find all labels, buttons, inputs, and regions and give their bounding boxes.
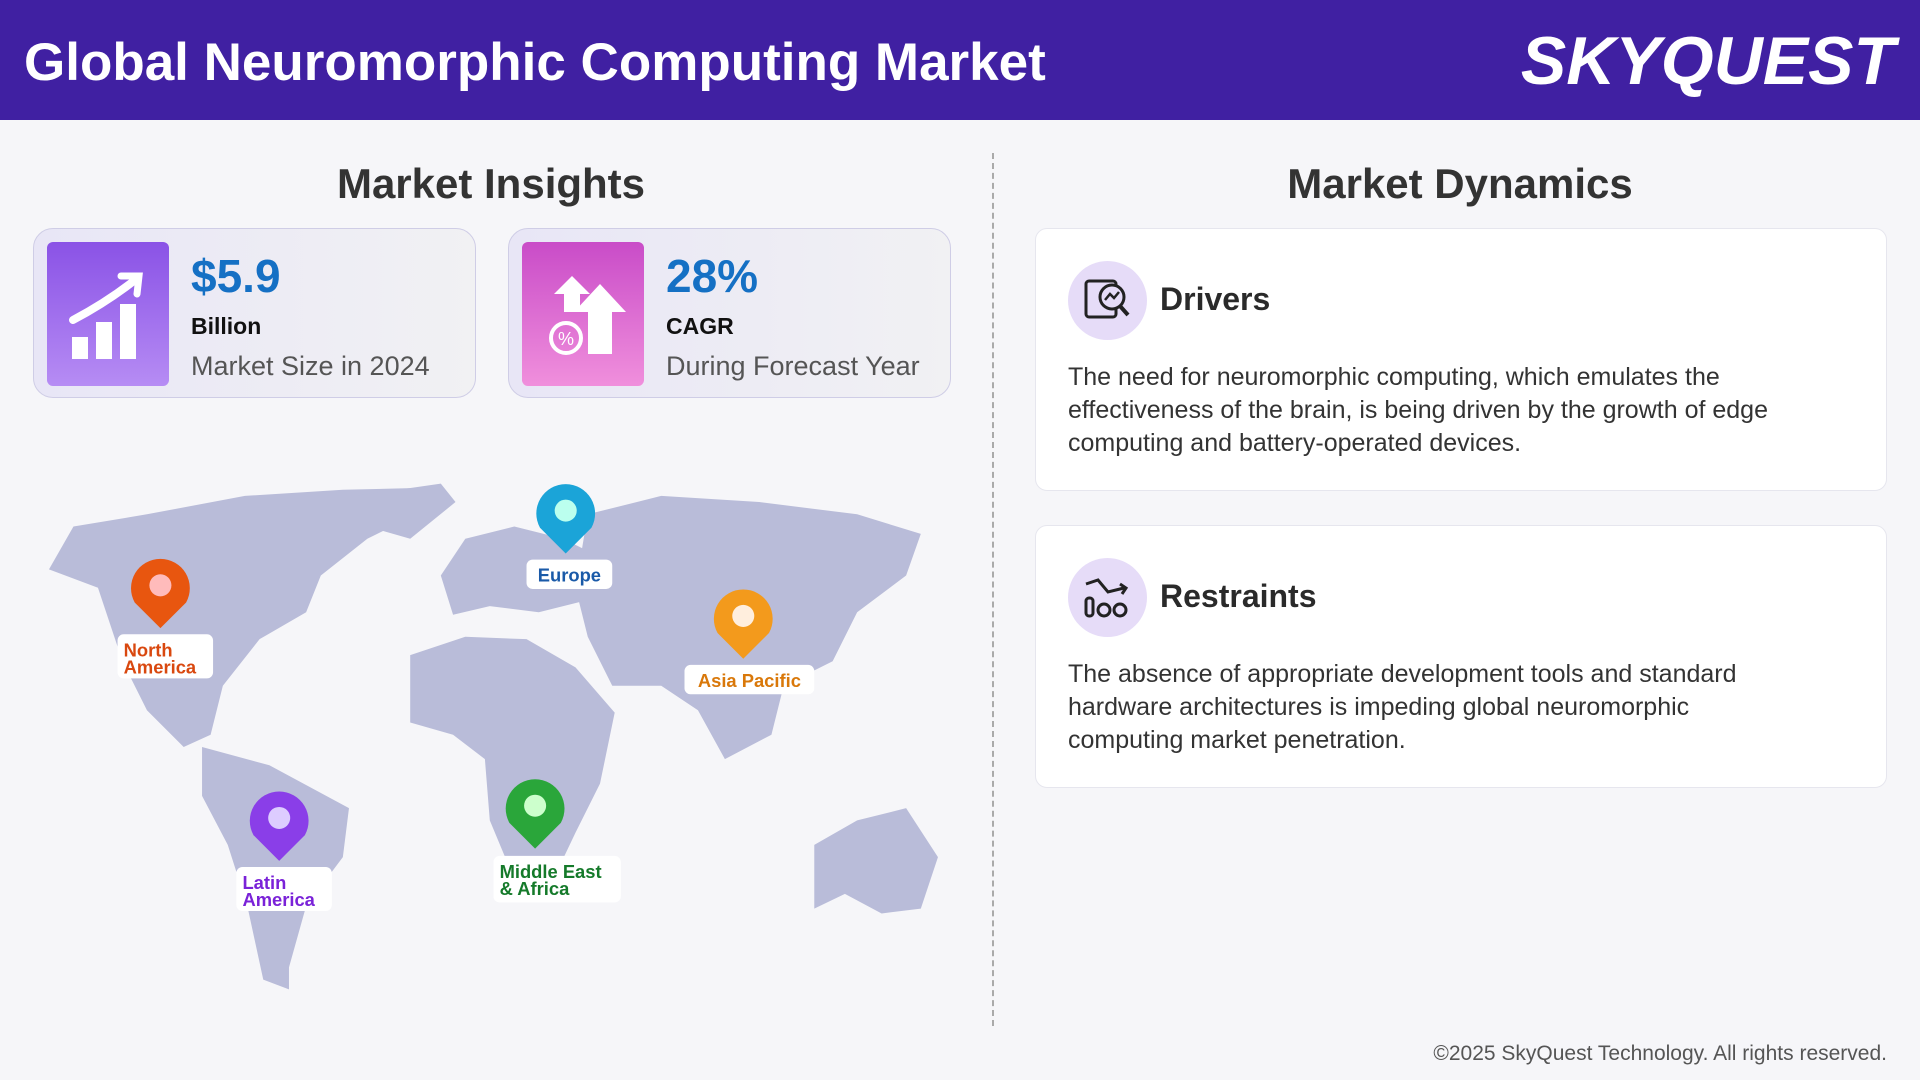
panel: restraints: The absence of appropriate development tools and standard hardware architectures is impeding global neuromorphic computing market penetration. — [1068, 660, 1737, 754]
title: Global Neuromorphic Computing Market — [24, 33, 1046, 92]
card: cagr: CAGR — [666, 313, 734, 339]
pin: north america: America — [124, 656, 197, 677]
pin: europe — [527, 484, 612, 589]
icon: growth chart — [47, 242, 169, 386]
logo: SKYQUEST — [1521, 23, 1895, 99]
pin: asia pacific: Asia Pacific — [698, 670, 801, 691]
heading: market insights: Market Insights — [337, 160, 645, 207]
header bar — [0, 0, 1920, 120]
icon: cagr arrows — [522, 242, 644, 386]
pin: middle east africa — [493, 779, 621, 902]
icon: cagr arrows: % — [558, 329, 574, 349]
pin: north america — [118, 559, 213, 678]
panel: drivers — [1035, 228, 1887, 491]
icon: restraints — [1068, 558, 1147, 637]
icon: drivers — [1068, 261, 1147, 340]
pin: asia pacific — [684, 589, 814, 694]
pin: europe: Europe — [538, 565, 601, 586]
panel: drivers: Drivers — [1160, 281, 1270, 317]
value: 28% — [666, 250, 758, 302]
panel: restraints: Restraints — [1160, 578, 1316, 614]
divider — [992, 153, 994, 1026]
pin: middle east africa: Middle East — [500, 861, 602, 882]
card: market size: Billion — [191, 313, 261, 339]
pin: latin america: America — [242, 889, 316, 910]
pin: north america: North — [124, 639, 173, 660]
card: cagr — [508, 228, 951, 398]
pin: middle east africa: & Africa — [500, 878, 570, 899]
card: market size: Market Size in 2024 — [191, 351, 430, 381]
heading: market dynamics: Market Dynamics — [1287, 160, 1633, 207]
pin: latin america — [236, 791, 332, 911]
panel: drivers: The need for neuromorphic computing, which emulates the effectiveness of the brain, is being driven by the growth of edge computing and battery-operated devices. — [1068, 363, 1768, 457]
panel: restraints — [1035, 525, 1887, 788]
footer: ©2025 SkyQuest Technology. All rights reserved. — [1433, 1042, 1887, 1065]
card: cagr: During Forecast Year — [666, 351, 920, 381]
pin: latin america: Latin — [242, 872, 286, 893]
card: market size — [33, 228, 476, 398]
value: $5.9 — [191, 250, 281, 302]
